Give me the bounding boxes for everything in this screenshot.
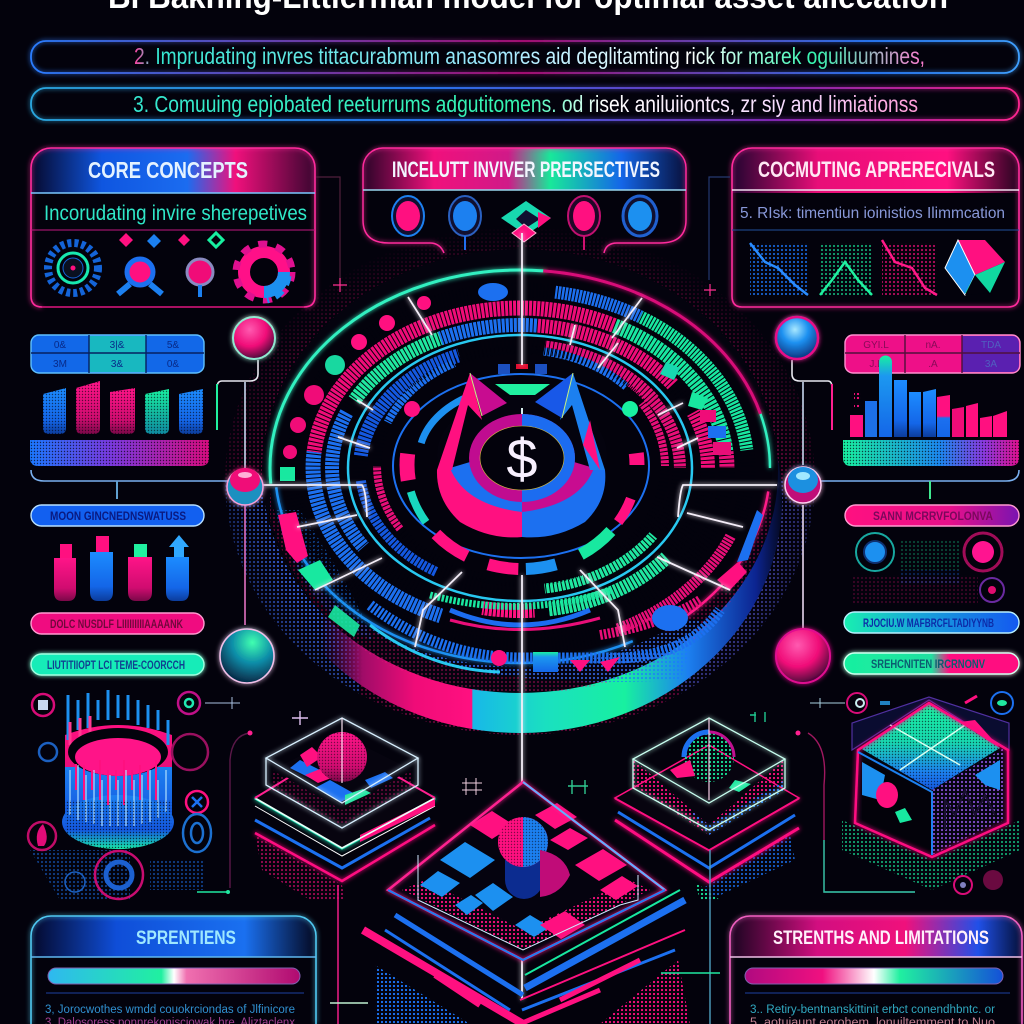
view orbs row bbox=[392, 196, 657, 250]
dollar symbol: $ bbox=[506, 427, 538, 490]
orb: bottom right bbox=[776, 629, 830, 683]
icon: teal gear ring bbox=[48, 243, 98, 293]
pill: green bbox=[31, 654, 204, 675]
pill: blue: MOON GINCNEDNSWATUSS bbox=[50, 511, 186, 523]
panel 3 subheading: 5. RIsk: timentiun ioinistios Ilimmcation bbox=[740, 205, 1005, 222]
cube top screen bbox=[860, 703, 1000, 790]
panel: core concepts bbox=[31, 148, 315, 307]
pill: pink: DOLC NUSDLF LIIIIIIIIIAAAANK bbox=[50, 619, 184, 631]
limitations gradient bar bbox=[745, 968, 1003, 984]
isometric stack: centre bbox=[363, 782, 690, 1024]
ring markers and tiles bbox=[278, 283, 763, 672]
orb: top left bbox=[233, 317, 275, 359]
orb 2 bbox=[449, 196, 481, 250]
platform left box bbox=[266, 718, 418, 828]
icon: gear bbox=[236, 244, 292, 300]
bottom rings bbox=[370, 590, 720, 672]
platform left halftone bbox=[255, 835, 345, 900]
platform right box bbox=[633, 718, 785, 835]
gradient bar: right bbox=[843, 440, 1019, 466]
cylinder body bbox=[62, 690, 174, 849]
3D bars: left bbox=[43, 381, 203, 435]
emblem ears bbox=[437, 373, 482, 470]
orb: mid right bbox=[785, 467, 821, 503]
orb 4 bbox=[623, 196, 657, 236]
platform right layers bbox=[615, 798, 799, 882]
pill: green-pink: SREHCNITEN IRCRNONV bbox=[871, 659, 985, 671]
pill bars: left bbox=[54, 535, 189, 601]
connectors bottom right bbox=[330, 712, 915, 1024]
table: left: 3|& bbox=[110, 340, 125, 351]
cube shell bbox=[852, 700, 1009, 857]
connectors bottom left bbox=[197, 697, 482, 1024]
chart: falling pink bbox=[882, 240, 937, 295]
table: right bbox=[845, 335, 1020, 373]
cylinder illustration bbox=[28, 690, 211, 900]
chart: green peak bbox=[820, 243, 872, 295]
inner tile ring bbox=[407, 361, 637, 569]
table: right: GYI.L bbox=[863, 340, 889, 351]
isometric platform: right bbox=[615, 718, 799, 900]
left column bbox=[30, 335, 209, 675]
cube right face bbox=[932, 748, 1004, 855]
hex cube: right bbox=[842, 697, 1020, 890]
strengths gradient bar bbox=[48, 968, 300, 984]
panel 2 header bbox=[363, 148, 686, 190]
panel 2 header: INCELUTT INVIVER PRERSECTIVES bbox=[392, 157, 660, 182]
emblem pupil ring bbox=[469, 414, 575, 502]
right connectors bbox=[792, 360, 1019, 630]
table: left: 0& bbox=[167, 359, 179, 370]
disc base gradient bbox=[258, 267, 782, 733]
platform left layers bbox=[255, 748, 435, 881]
orb: bottom left bbox=[220, 629, 274, 683]
platform right halftone bbox=[700, 835, 795, 900]
panel 1 header: CORE CONCEPTS bbox=[88, 157, 248, 183]
table: right: TDA bbox=[981, 340, 1001, 351]
pill: magenta: SANN MCRRVFOLONVA bbox=[873, 511, 993, 523]
limitations header bbox=[730, 916, 1022, 957]
icon: network node magenta bbox=[178, 233, 223, 297]
table: right: .A bbox=[928, 359, 938, 370]
panel 1 header bbox=[31, 148, 315, 193]
decorative connectors near panels bbox=[316, 177, 730, 296]
cube halftone bbox=[842, 820, 1020, 890]
stack lower layers bbox=[363, 890, 685, 1024]
strengths text: 3, Jorocwothes wmdd couokrciondas of Jlfinicore bbox=[45, 1004, 295, 1016]
panel: inverse perspectives bbox=[363, 148, 686, 253]
orb 1 bbox=[392, 196, 424, 236]
gradient bar: left bbox=[30, 440, 209, 466]
cube satellites bbox=[810, 692, 1013, 894]
chart: falling blue bbox=[750, 243, 808, 295]
hatched rings bbox=[292, 290, 748, 646]
pill: green-pink bbox=[844, 653, 1019, 674]
icon: recycling shape bbox=[945, 240, 1005, 295]
central disc bbox=[225, 225, 815, 1000]
table: left: 0& bbox=[54, 340, 66, 351]
disc face bbox=[262, 249, 778, 693]
orb 3 bbox=[568, 196, 600, 250]
limitations text: 3.. Retiry-bentnanskittinit erbct conendhbntc. or bbox=[750, 1004, 995, 1016]
strengths text bbox=[45, 1004, 295, 1024]
stack halftone bbox=[375, 965, 470, 1024]
cylinder satellites bbox=[28, 692, 211, 899]
disc halftone halo bbox=[225, 225, 815, 735]
cylinder halftone bbox=[30, 850, 205, 900]
pill: blue bbox=[31, 505, 204, 526]
table: right: 3A bbox=[985, 359, 997, 370]
strengths header bbox=[31, 916, 316, 957]
cube left face bbox=[862, 760, 932, 855]
table: right: J.L bbox=[869, 359, 883, 370]
panel: strengths and limitations bbox=[730, 916, 1022, 1024]
pill: green-blue bbox=[844, 612, 1019, 633]
table: left bbox=[31, 335, 204, 373]
panel 3 header bbox=[732, 148, 1019, 193]
table: left: 3M bbox=[53, 359, 67, 370]
pill: green: LIUTITIIOPT LCI TEME-COORCCH bbox=[47, 660, 185, 672]
pill: magenta bbox=[845, 505, 1019, 526]
limitations text bbox=[750, 1004, 995, 1024]
strengths header: SPRENTIENS bbox=[136, 928, 236, 949]
outer rim ring bbox=[270, 270, 770, 666]
orb: top right bbox=[776, 317, 818, 359]
icon: network node pink bbox=[118, 233, 162, 294]
isometric platform: left bbox=[255, 718, 435, 900]
emblem lower masses bbox=[437, 470, 522, 537]
white spokes bbox=[262, 233, 777, 1000]
stack top diamond bbox=[388, 782, 665, 960]
table: left: 3& bbox=[111, 359, 123, 370]
pill: pink bbox=[31, 613, 204, 634]
left connectors bbox=[31, 360, 258, 625]
orb: mid left bbox=[227, 468, 263, 505]
cube outline bbox=[855, 703, 1008, 857]
bar chart: right bbox=[850, 356, 1007, 437]
table: right: nA. bbox=[925, 340, 941, 351]
diamond icon bbox=[501, 201, 551, 242]
panel: computing approvals bbox=[732, 148, 1019, 307]
table: left: 5& bbox=[167, 340, 179, 351]
target icons with dot matrix bbox=[853, 533, 1004, 605]
right column bbox=[843, 335, 1020, 674]
panel: strengths bbox=[31, 916, 316, 1024]
central emblem with dollar sign bbox=[437, 373, 607, 537]
panel 1 subheading: Incorudating invire sherepetives bbox=[44, 202, 307, 225]
